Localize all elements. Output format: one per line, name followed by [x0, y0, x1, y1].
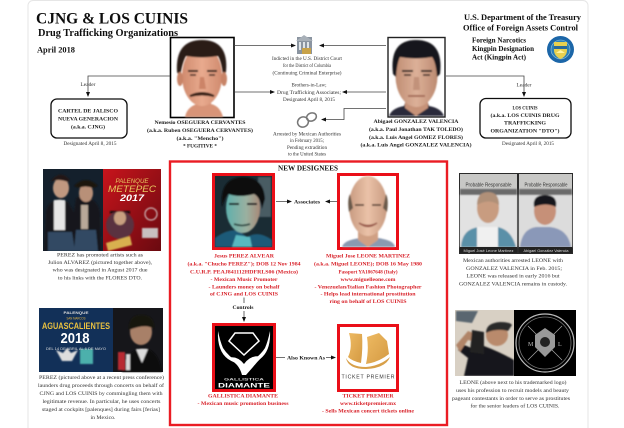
box: Los Cuinis	[480, 98, 571, 138]
caption: Perez launders proceeds: PEREZ (pictured above at a recent press conference)	[39, 374, 164, 381]
photo: Aguascalientes poster and Perez at press conference: DEL 14 DE ABRIL AL 6 DE MAYO	[46, 347, 106, 351]
text: Leone details: - Helps lead international prostitution	[320, 292, 416, 298]
text: indictment	[272, 57, 343, 76]
logo: Gallistica Diamante	[212, 323, 276, 392]
arrow: Nemesio leads CJNG	[86, 76, 170, 97]
label: leader left: Leader	[80, 83, 96, 88]
text: Perez details: - Launders money on behalf	[208, 284, 280, 290]
designation date left: Designated April 8, 2015	[64, 142, 117, 147]
photo: mugshots of Leone and Gonzalez Valencia: Probable Responsable	[524, 182, 568, 188]
associates connector: Associates	[294, 200, 321, 206]
logo: Gallistica Diamante: DIAMANTE	[218, 384, 270, 390]
caption: arrests: LEONE was released in early 2016 but	[466, 274, 560, 280]
arrows to courthouse	[234, 44, 386, 48]
text: Leone details: ring on behalf of LOS CUINIS	[330, 299, 406, 305]
text: Leone details: - Venezuelan/Italian Fashion Photographer	[314, 284, 422, 290]
photo: Perez with Julion Alvarez and Metepec poster: METEPEC	[108, 184, 157, 194]
icon: treasury seal	[547, 36, 574, 63]
caption: Perez promotes artists: Julion ALVAREZ (pictured together above),	[48, 259, 153, 266]
caption: Perez launders proceeds: staged at cockpits [palenques] during fairs [ferias]	[42, 406, 160, 413]
agency heading	[463, 13, 582, 62]
photo: mugshots of Leone and Gonzalez Valencia	[459, 173, 573, 254]
photo: mugshots of Leone and Gonzalez Valencia: Abigael González Valencia	[524, 249, 569, 253]
arrow: Abigael leads Los Cuinis	[446, 76, 526, 97]
caption: Leone recruits: for the senior leaders of LOS CUINIS.	[470, 402, 560, 410]
controls connector: Controls	[232, 305, 254, 311]
box: CJNG: (a.k.a. CJNG)	[71, 124, 105, 130]
label: leader right: Leader	[516, 84, 532, 88]
caption: Leone recruits	[452, 379, 570, 410]
text: arrest	[273, 132, 341, 158]
caption: Abigael names	[360, 119, 472, 148]
caption: Abigael names: (a.k.a. Luis Angel GOMEZ FLORES)	[369, 134, 463, 141]
photo: Nemesio Oseguera Cervantes	[170, 38, 234, 118]
photo: Aguascalientes poster and Perez at press conference: PALENQUE	[64, 311, 89, 315]
text: arrest: Pending extradition	[287, 146, 327, 151]
caption: Nemesio names: Nemesio OSEGUERA CERVANTES	[154, 120, 246, 126]
also known as connector: Also Known As	[287, 356, 326, 362]
text: Ticket Premier details: www.ticketpremier.mx	[340, 401, 396, 407]
box: Los Cuinis: (a.k.a. LOS CUINIS DRUG	[490, 112, 560, 119]
text: Perez details: (a.k.a. "Chucho PEREZ"); DOB 12 Nov 1984	[188, 260, 301, 268]
caption: Leone recruits: LEONE (above next to his trademarked logo)	[460, 379, 567, 386]
caption: Perez promotes artists: who was designated in August 2017 due	[52, 268, 148, 274]
photo: Jesus Perez Alvear	[212, 173, 275, 250]
text: Leone details: Passport YA1867648 (Italy)	[338, 268, 398, 276]
heading: new designees: NEW DESIGNEES	[278, 164, 338, 172]
logo: Ticket Premier	[337, 324, 399, 392]
caption: Nemesio names: (a.k.a. Ruben OSEGUERA CERVANTES)	[147, 127, 253, 134]
title block: Drug Trafficking Organizations	[38, 28, 178, 39]
box: Los Cuinis: LOS CUINIS	[512, 106, 538, 112]
text: Gallistica details: GALLISTICA DIAMANTE	[208, 394, 278, 400]
text: Leone details	[314, 254, 422, 305]
text: brothers-in-law: Designated April 8, 2015	[283, 98, 336, 103]
box: CJNG	[51, 99, 127, 138]
text: indictment: for the District of Columbia	[283, 64, 332, 69]
text: Leone details: Miguel Jose LEONE MARTINEZ	[326, 254, 410, 260]
title block	[36, 10, 188, 54]
caption: arrests: GONZALEZ VALENCIA remains in custody.	[459, 282, 568, 288]
associates connector	[276, 200, 337, 206]
photo: Abigael Gonzalez Valencia	[388, 38, 445, 117]
text: arrest: to the United States	[288, 152, 326, 158]
text: Ticket Premier details: - Sells Mexican concert tickets online	[322, 408, 415, 414]
icon: handcuffs	[296, 112, 318, 129]
panel: new designees	[170, 162, 447, 425]
box: CJNG: CARTEL DE JALISCO	[58, 108, 119, 114]
box: Los Cuinis: TRAFFICKING	[504, 120, 547, 126]
text: Perez details: Jesus PEREZ ALVEAR	[214, 254, 275, 260]
caption: Perez launders proceeds: in Mexico.	[90, 415, 116, 421]
designation date right: Designated April 8, 2015	[502, 142, 555, 147]
caption: Nemesio names: (a.k.a. "Mencho")	[176, 135, 224, 142]
caption: Perez launders proceeds: CJNG and LOS CUINIS by commingling them with	[40, 391, 163, 397]
photo: Leone and trademarked logo: M	[528, 342, 534, 348]
caption: Abigael names: (a.k.a. Paul Jonathan TAK TOLEDO)	[369, 126, 463, 133]
icon: courthouse	[296, 35, 313, 54]
text: Perez details: of CJNG and LOS CUINIS	[210, 292, 278, 298]
caption: Perez promotes artists: PEREZ has promoted artists such as	[57, 252, 143, 258]
title block: April 2018	[37, 46, 75, 54]
agency heading: Foreign Narcotics	[472, 38, 526, 44]
caption: arrests	[459, 258, 568, 288]
text: Ticket Premier details	[322, 394, 415, 414]
caption: Leone recruits: pageant contestants in order to serve as prostitutes	[452, 396, 570, 402]
photo: Miguel Jose Leone Martinez	[337, 173, 399, 250]
box: Los Cuinis: ORGANIZATION "DTO")	[490, 128, 560, 134]
photo: Aguascalientes poster and Perez at press conference	[39, 308, 163, 372]
text: Gallistica details	[198, 394, 289, 407]
text: Perez details	[188, 254, 301, 298]
text: Leone details: www.miguelleone.com	[340, 277, 396, 283]
text: arrest: Arrested by Mexican Authorities	[273, 132, 341, 138]
photo: Perez with Julion Alvarez and Metepec poster	[43, 169, 161, 251]
box: CJNG: NUEVA GENERACION	[58, 116, 118, 122]
controls connector	[232, 298, 254, 322]
agency heading: Act (Kingpin Act)	[472, 54, 526, 62]
text: indictment: (Continuing Criminal Enterprise)	[272, 72, 342, 76]
caption: Leone recruits: uses his profession to recruit models and beauty	[456, 387, 569, 394]
caption: Perez launders proceeds	[38, 374, 164, 421]
text: Leone details: (a.k.a. Miguel LEONE); DOB 16 May 1980	[314, 260, 422, 268]
photo: mugshots of Leone and Gonzalez Valencia: Probable Responsable	[466, 182, 512, 188]
photo: Perez with Julion Alvarez and Metepec poster: 2017	[119, 193, 145, 203]
photo: mugshots of Leone and Gonzalez Valencia: Miguel José Leone Martínez	[464, 249, 514, 253]
logo: Ticket Premier: TICKET PREMIER	[342, 374, 395, 380]
arrow to handcuffs	[321, 108, 386, 122]
text: brothers-in-law: Brothers-in-Law;	[292, 84, 326, 88]
agency heading: Kingpin Designation	[472, 46, 534, 53]
also known as connector	[276, 356, 336, 362]
caption: Perez promotes artists	[48, 252, 153, 282]
caption: Abigael names: (a.k.a. Luis Angel GONZALEZ VALENCIA)	[360, 142, 472, 148]
caption: Perez launders proceeds: legitimate revenue. In particular, he uses concerts	[42, 399, 160, 405]
text: brothers-in-law	[277, 84, 341, 103]
text: Perez details: C.U.R.P. PEAJ841112HDFRLS06 (Mexico)	[190, 268, 298, 276]
text: arrest: in February 2015;	[290, 139, 324, 144]
arrows to brothers-in-law text	[235, 90, 386, 94]
caption: Nemesio names: * FUGITIVE *	[183, 144, 217, 150]
photo: Aguascalientes poster and Perez at press conference: SAN MARCOS	[66, 316, 86, 320]
caption: arrests: GONZALEZ VALENCIA in Feb. 2015;	[466, 266, 562, 272]
caption: Nemesio names	[147, 120, 253, 150]
text: Gallistica details: - Mexican music promotion business	[198, 401, 289, 407]
text: brothers-in-law: Drug Trafficking Associates;	[277, 91, 341, 96]
text: Perez details: - Mexican Music Promoter	[210, 277, 278, 283]
photo: Aguascalientes poster and Perez at press conference: 2018	[60, 330, 90, 347]
caption: Perez promotes artists: to his links with the FLORES DTO.	[58, 276, 143, 282]
text: indictment: Indicted in the U.S. District Court	[272, 57, 343, 62]
caption: Perez launders proceeds: launders drug proceeds through concerts on behalf of	[38, 382, 164, 389]
photo: Perez with Julion Alvarez and Metepec poster: PALENQUE	[116, 179, 150, 185]
logo: Gallistica Diamante: GALLISTICA	[224, 378, 265, 382]
photo: Leone and trademarked logo	[455, 310, 576, 376]
agency heading: U.S. Department of the Treasury	[464, 13, 582, 22]
text: Ticket Premier details: TICKET PREMIER	[342, 394, 394, 400]
photo: Leone and trademarked logo: L	[558, 342, 562, 348]
title block: CJNG & LOS CUINIS	[36, 10, 188, 28]
caption: Abigael names: Abigael GONZALEZ VALENCIA	[374, 119, 458, 125]
agency heading: Office of Foreign Assets Control	[463, 24, 579, 32]
photo: Aguascalientes poster and Perez at press conference: AGUASCALIENTES	[42, 321, 110, 331]
caption: arrests: Mexican authorities arrested LEONE with	[463, 258, 563, 264]
